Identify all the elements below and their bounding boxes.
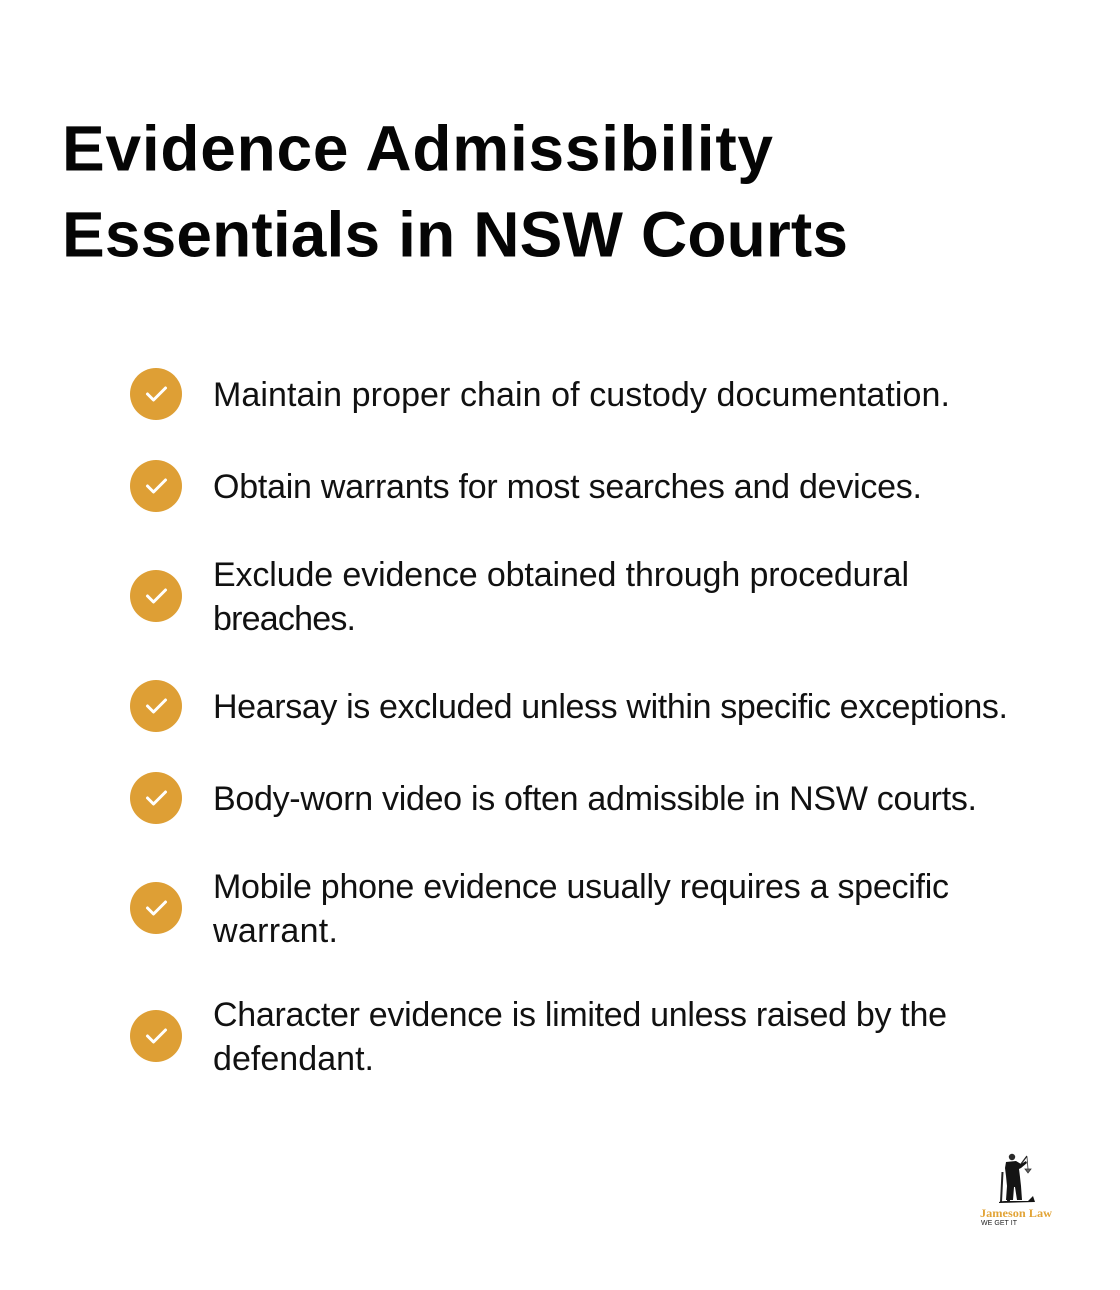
logo tagline: WE GET IT (981, 1220, 1018, 1227)
item: warrants (130, 460, 922, 512)
item: character evidence: defendant. (213, 1040, 374, 1078)
item: mobile phone: warrant. (212, 912, 338, 950)
item: procedural breaches: Exclude evidence obtained through procedural (213, 556, 909, 594)
checklist (130, 368, 1008, 1078)
item: character evidence: Character evidence is limited unless raised by the (213, 996, 947, 1034)
title (62, 112, 848, 270)
item: mobile phone (130, 868, 949, 950)
logo name: Jameson Law (980, 1206, 1052, 1220)
item: body-worn video (130, 772, 977, 824)
item: character evidence (130, 996, 947, 1078)
item: hearsay: Hearsay is excluded unless within specific exceptions. (213, 688, 1008, 726)
icon: lady justice (999, 1154, 1035, 1203)
item: mobile phone: Mobile phone evidence usually requires a specific (213, 868, 949, 906)
item: hearsay (130, 680, 1008, 732)
item: chain of custody: Maintain proper chain of custody documentation. (213, 376, 950, 414)
title: Essentials in NSW Courts (62, 198, 848, 270)
item: warrants: Obtain warrants for most searches and devices. (213, 468, 922, 506)
item: chain of custody (130, 368, 950, 420)
title: Evidence Admissibility (62, 112, 773, 184)
item: procedural breaches (130, 556, 909, 638)
item: body-worn video: Body-worn video is often admissible in NSW courts. (213, 780, 977, 818)
item: procedural breaches: breaches. (213, 600, 356, 638)
logo: Jameson Law (980, 1154, 1052, 1227)
